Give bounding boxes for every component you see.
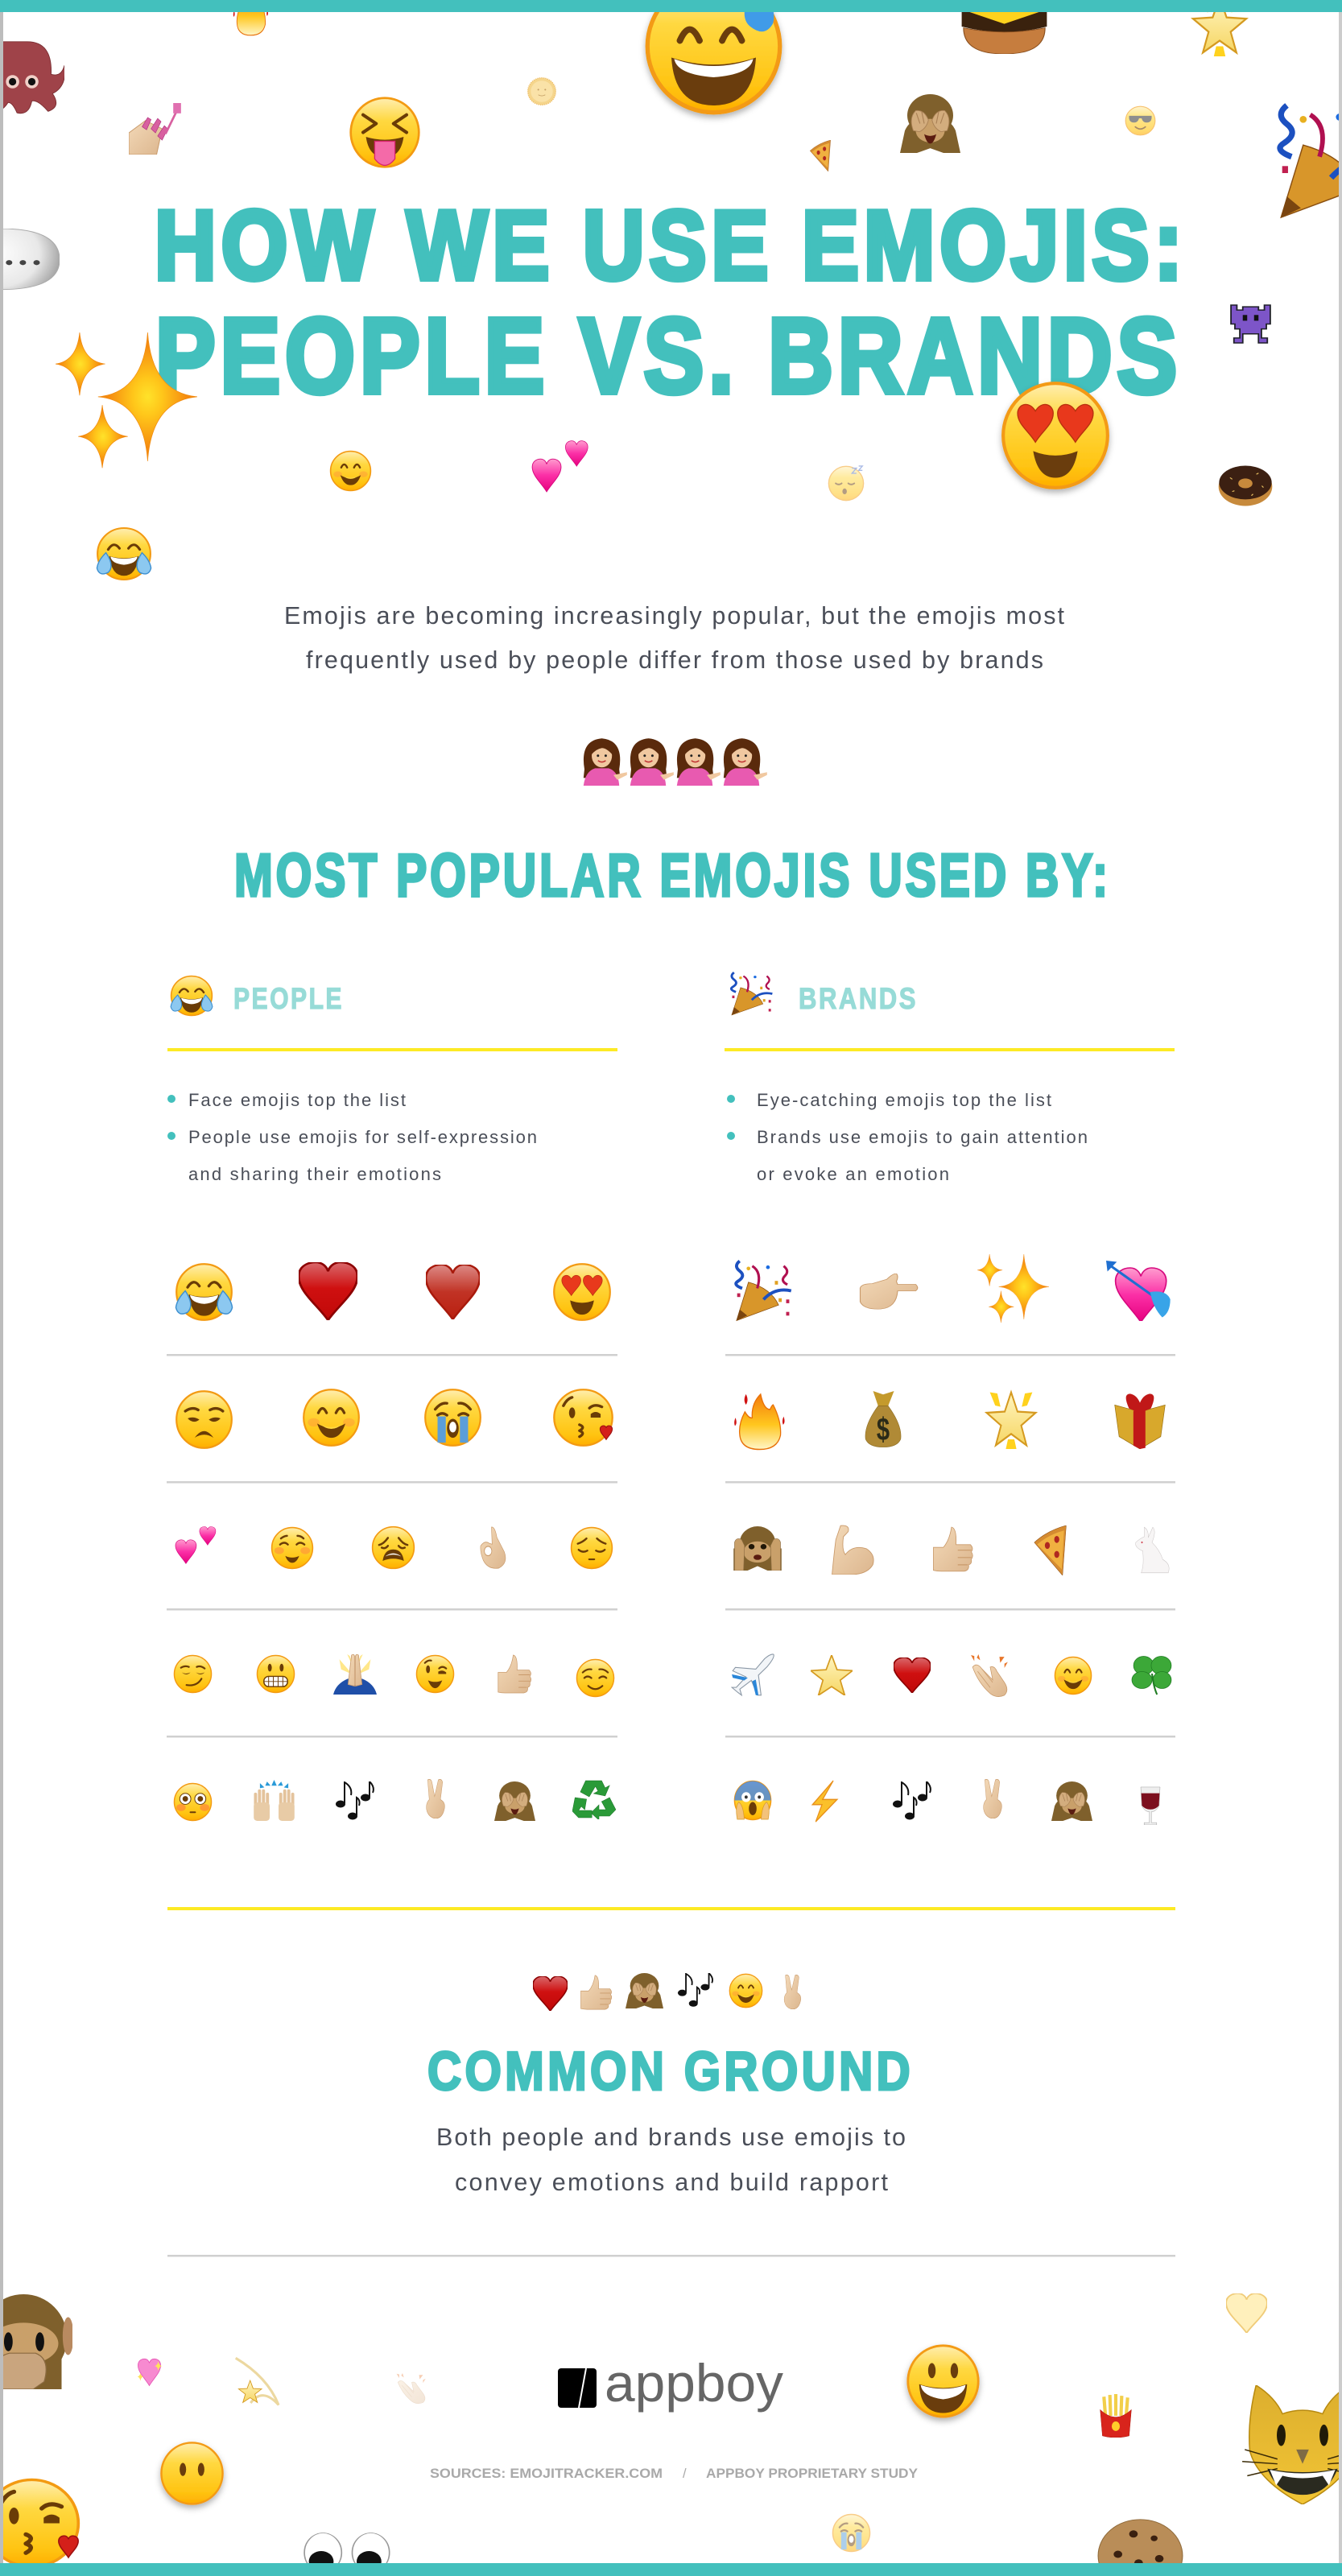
bullet list: brands: [727, 1090, 1088, 1184]
yellow rule: [167, 1907, 1175, 1910]
body text: [436, 2124, 906, 2196]
bullet list: brands: Eye-catching emojis top the list: [757, 1090, 1051, 1110]
bullet list: brands: or evoke an emotion: [757, 1164, 949, 1184]
intro text: Emojis are becoming increasingly popular, but the emojis most: [284, 602, 1065, 630]
heading: brands: BRANDS: [799, 982, 918, 1015]
bullet list: people: People use emojis for self-expression: [188, 1127, 537, 1147]
emoji grid: people: [167, 1262, 617, 1821]
yellow rule: [167, 1048, 617, 1051]
title: PEOPLE VS. BRANDS: [155, 296, 1182, 415]
sources: [430, 2467, 918, 2481]
bullet list: people: [167, 1090, 537, 1184]
intro text: [284, 602, 1065, 674]
body text: Both people and brands use emojis to: [436, 2124, 906, 2151]
title: HOW WE USE EMOJIS:: [155, 190, 1187, 299]
icon: party popper: [731, 972, 772, 1015]
emoji grid: brands: [725, 1254, 1175, 1825]
panel: brands: [725, 972, 1175, 1825]
panel: people: [167, 976, 617, 1821]
heading: people: PEOPLE: [233, 982, 344, 1015]
title: [155, 190, 1187, 415]
intro text: frequently used by people differ from those used by brands: [306, 646, 1043, 674]
bullet list: people: Face emojis top the list: [188, 1090, 406, 1110]
sources: SOURCES: EMOJITRACKER.COM: [430, 2467, 663, 2481]
scattered emoji: footer: [0, 2293, 1342, 2576]
icon: laughing face: [171, 976, 213, 1015]
icon row: shared emojis: [533, 1973, 801, 2011]
bullet list: people: and sharing their emotions: [188, 1164, 441, 1184]
yellow rule: [725, 1048, 1175, 1051]
bullet list: brands: Brands use emojis to gain attention: [757, 1127, 1088, 1147]
icon row: four girl emojis: [584, 738, 767, 786]
sources: APPBOY PROPRIETARY STUDY: [706, 2467, 918, 2481]
logo: appboy: appboy: [605, 2353, 783, 2413]
body text: convey emotions and build rapport: [455, 2169, 889, 2196]
panel: common ground: [167, 1907, 1175, 2257]
sources: /: [683, 2467, 687, 2481]
heading: common ground: COMMON GROUND: [427, 2041, 914, 2102]
scattered emoji: header: [0, 0, 1342, 580]
